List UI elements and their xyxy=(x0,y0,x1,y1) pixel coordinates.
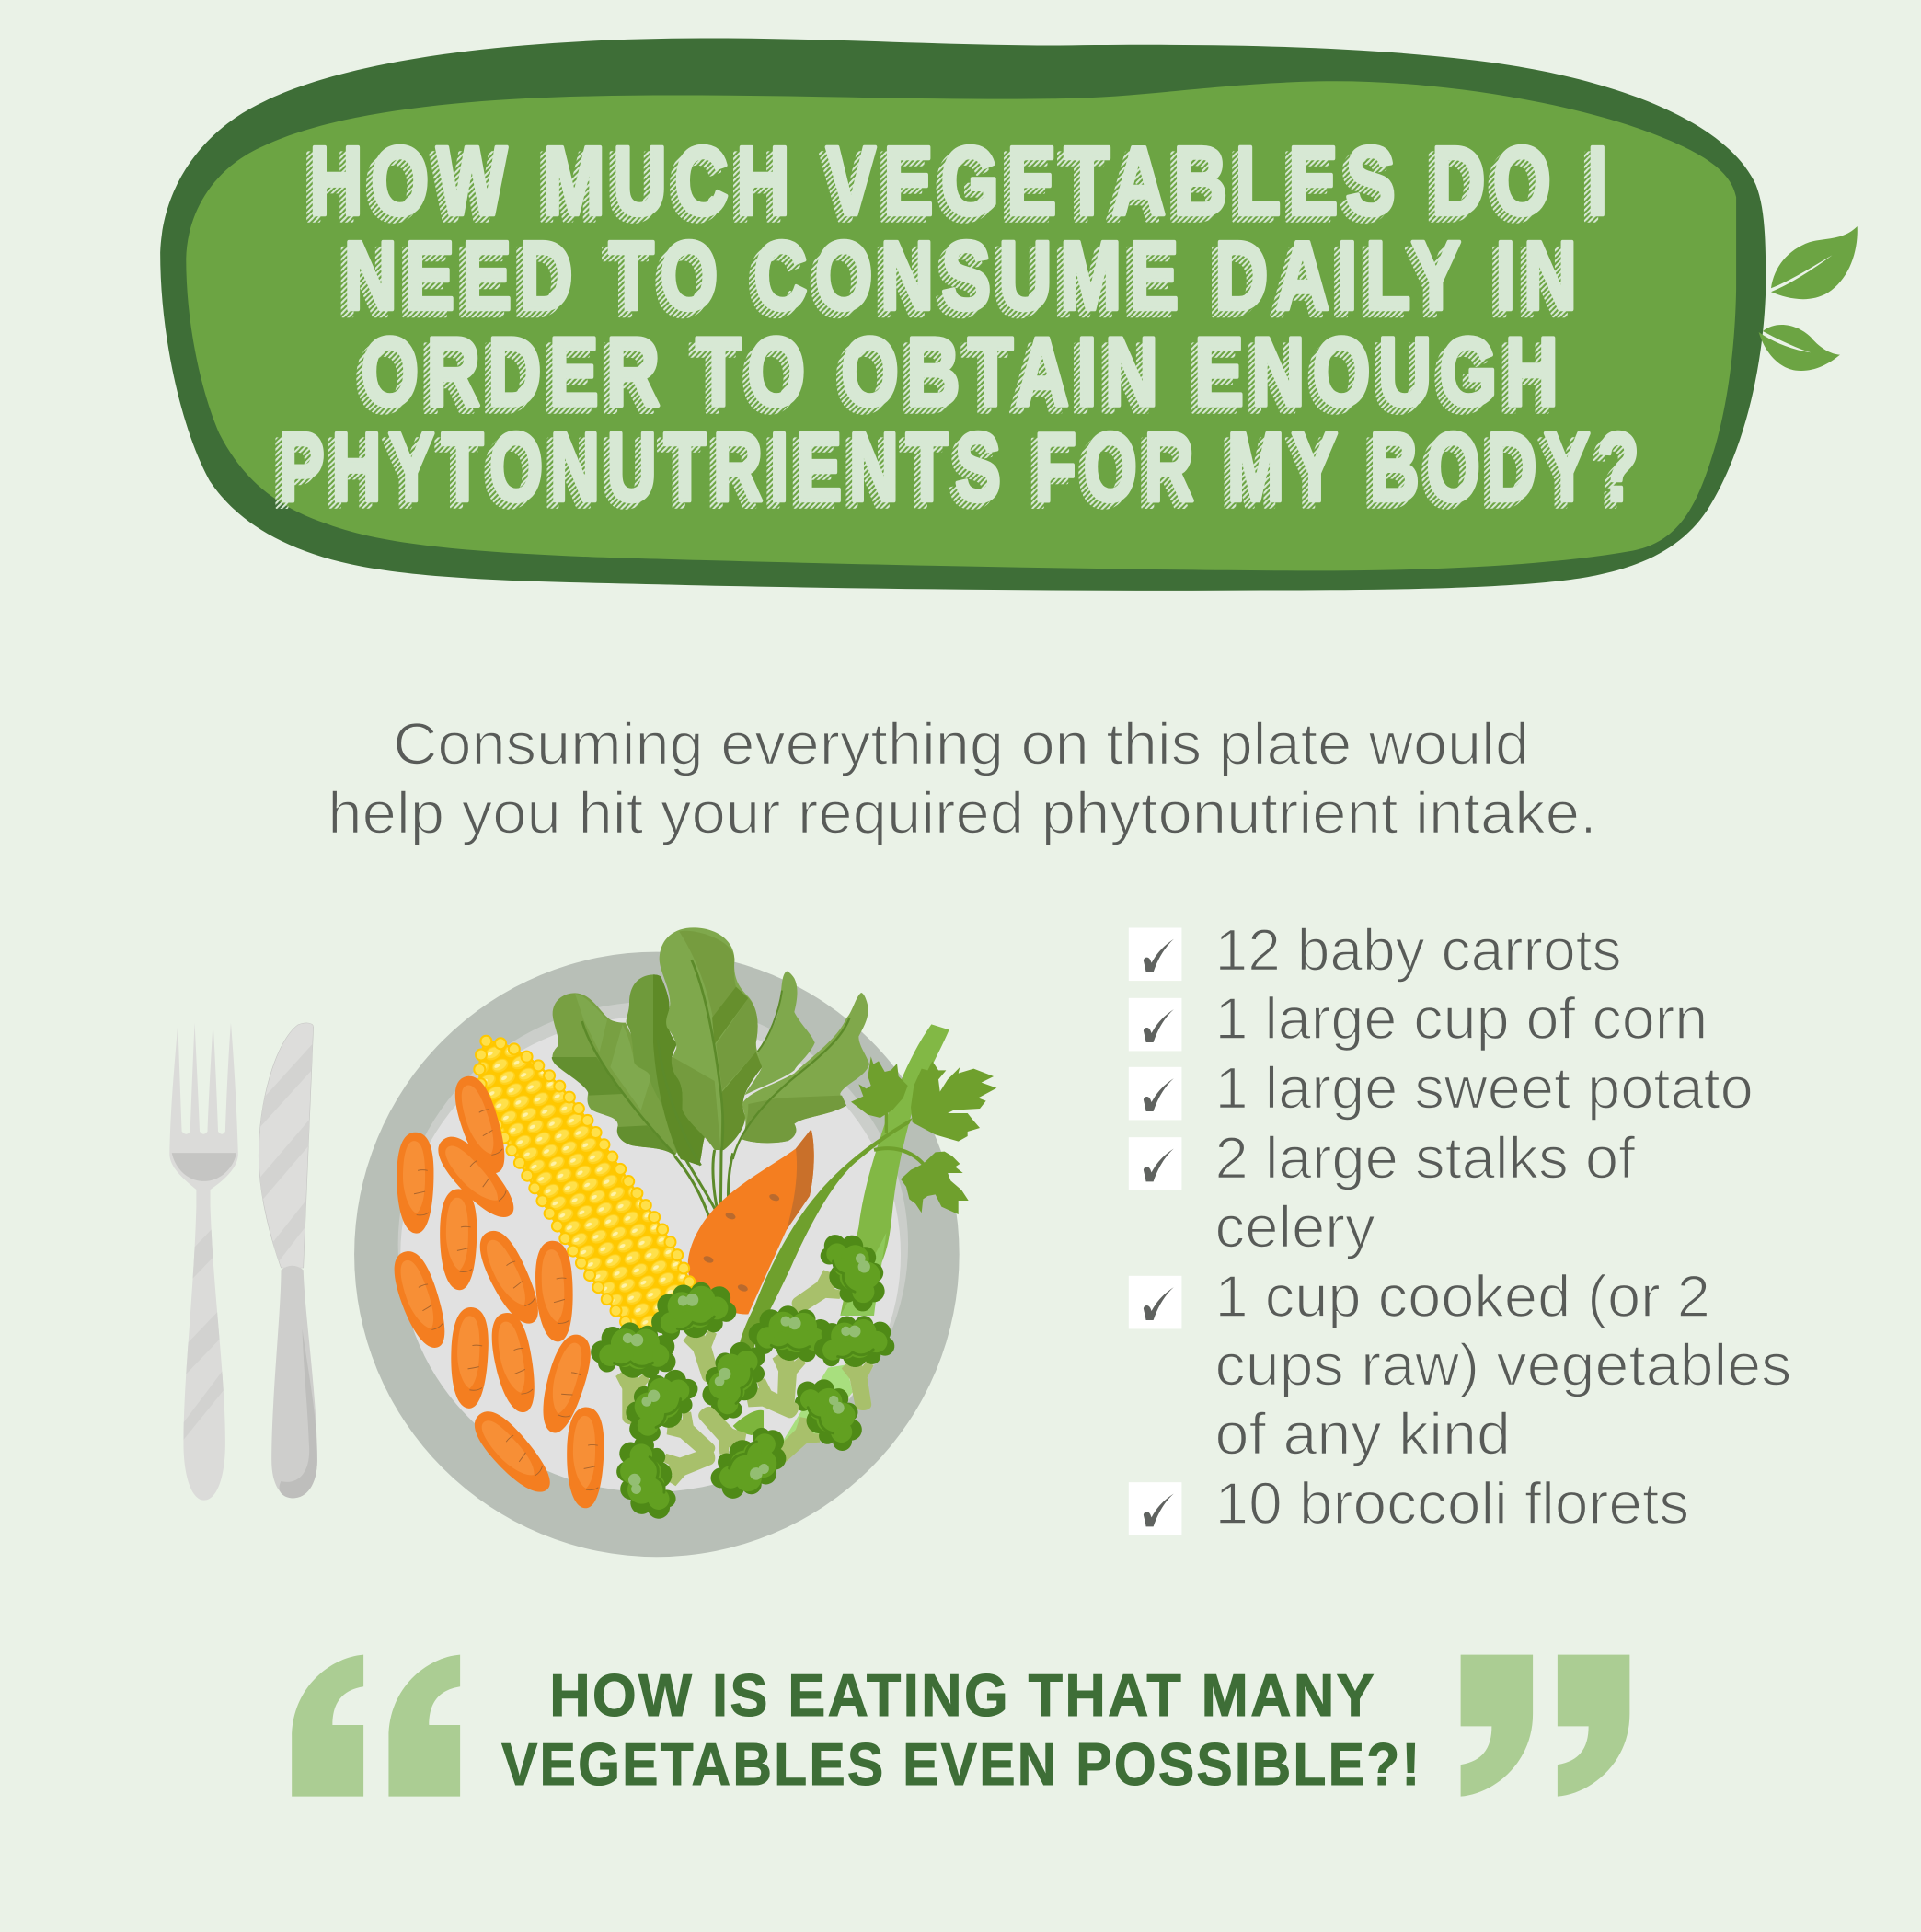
sweet potato xyxy=(688,1129,814,1314)
parsley leaf top xyxy=(851,1056,908,1118)
title text xyxy=(279,127,1646,522)
leaf: right small xyxy=(745,972,815,1095)
item: 1 large sweet potato: 1 large sweet potato xyxy=(1215,1055,1754,1121)
title text: ORDER TO OBTAIN ENOUGH xyxy=(361,318,1566,427)
quote text: HOW IS EATING THAT MANY xyxy=(549,1662,1376,1729)
item: 2 large stalks of celery: celery xyxy=(1215,1193,1375,1259)
parsley leaf right xyxy=(911,1061,996,1142)
item: 1 cup cooked vegetables: 1 cup cooked (or 2 xyxy=(1215,1263,1710,1329)
title hatched shadow: ORDER TO OBTAIN ENOUGH xyxy=(355,324,1560,432)
icon: leaves on banner xyxy=(1759,226,1858,371)
item: 2 large stalks of celery xyxy=(1129,1124,1635,1259)
illustration: plate with vegetables xyxy=(354,927,996,1557)
parsley leaf lower xyxy=(901,1152,969,1214)
banner blob inner xyxy=(186,81,1736,570)
item: 1 cup cooked vegetables: cups raw) vegetables xyxy=(1215,1331,1791,1397)
quote text xyxy=(501,1662,1422,1798)
quote text: VEGETABLES EVEN POSSIBLE?! xyxy=(501,1731,1422,1798)
quote section xyxy=(292,1655,1629,1798)
icon: opening quote marks xyxy=(292,1655,460,1797)
leaf: back left dark xyxy=(627,974,706,1166)
leaf: right large xyxy=(733,993,869,1159)
leaf: center large xyxy=(660,927,762,1153)
title text: NEED TO CONSUME DAILY IN xyxy=(344,222,1584,330)
leaf stems xyxy=(674,1150,733,1222)
leafy greens xyxy=(552,927,869,1222)
item: 12 baby carrots: 12 baby carrots xyxy=(1215,917,1622,983)
checklist xyxy=(1129,917,1791,1536)
icon: knife xyxy=(253,1023,317,1498)
icon: closing quote marks xyxy=(1461,1655,1629,1797)
header: title banner xyxy=(160,38,1858,591)
celery stalk xyxy=(733,1024,949,1455)
green stem and parsley xyxy=(738,1056,996,1355)
intro text xyxy=(328,710,1597,845)
item: 1 large cup of corn: 1 large cup of corn xyxy=(1215,985,1708,1052)
broccoli florets xyxy=(583,1221,900,1527)
illustration: cutlery xyxy=(169,1023,317,1501)
intro text: Consuming everything on this plate would xyxy=(393,710,1529,776)
banner blob outer xyxy=(160,38,1766,591)
corn on the cob xyxy=(479,1041,692,1334)
item: 1 cup cooked vegetables xyxy=(1129,1263,1791,1466)
icon: fork xyxy=(169,1023,238,1501)
item: 1 cup cooked vegetables: of any kind xyxy=(1215,1400,1511,1466)
plate xyxy=(354,952,960,1557)
stem xyxy=(738,1118,913,1355)
leaf: far left xyxy=(552,993,687,1156)
title hatched shadow: NEED TO CONSUME DAILY IN xyxy=(338,228,1579,337)
baby carrots xyxy=(386,1071,604,1509)
intro text: help you hit your required phytonutrient intake. xyxy=(328,779,1597,845)
title heading xyxy=(272,127,1646,527)
item: 10 broccoli florets: 10 broccoli florets xyxy=(1215,1470,1689,1536)
title hatched shadow xyxy=(272,133,1640,527)
item: 2 large stalks of celery: 2 large stalks of xyxy=(1215,1124,1635,1190)
